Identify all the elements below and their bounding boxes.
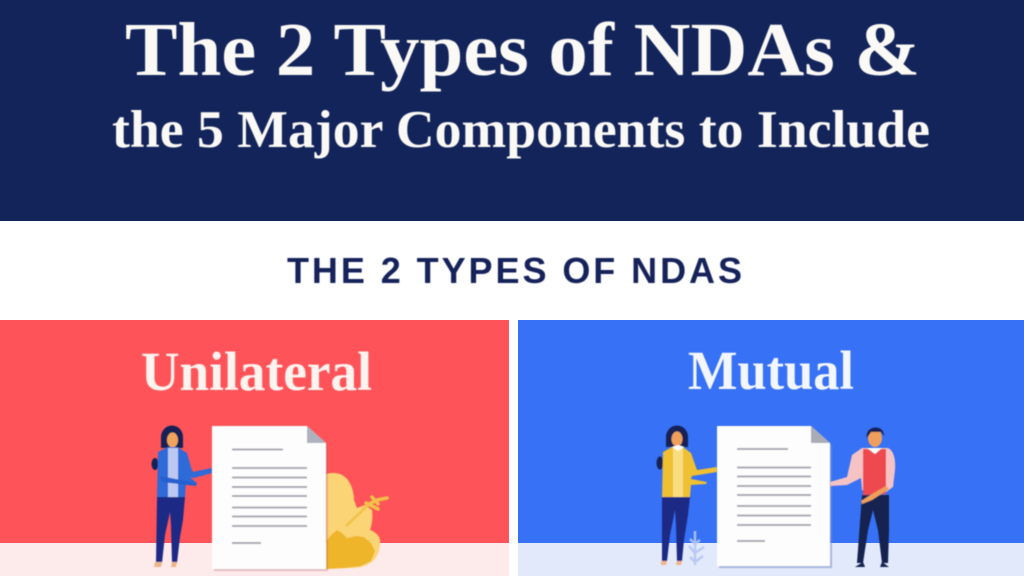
icon: man in red vest — [830, 428, 895, 567]
icon: yellow plant — [326, 473, 387, 569]
panel heading: mutual: Mutual — [688, 340, 854, 401]
panel: unilateral — [0, 320, 509, 576]
panel heading: unilateral: Unilateral — [141, 341, 372, 402]
section heading: THE 2 TYPES OF NDAS — [287, 250, 742, 291]
icon: document — [212, 426, 328, 571]
icon: pale plant — [689, 531, 704, 565]
icon: woman in blue — [152, 426, 212, 567]
icon: woman in yellow — [656, 426, 717, 565]
icon: document — [717, 426, 832, 568]
panel: mutual — [518, 320, 1024, 576]
title line 1: The 2 Types of NDAs & — [125, 8, 920, 92]
title line 2: the 5 Major Components to Include — [112, 101, 930, 159]
